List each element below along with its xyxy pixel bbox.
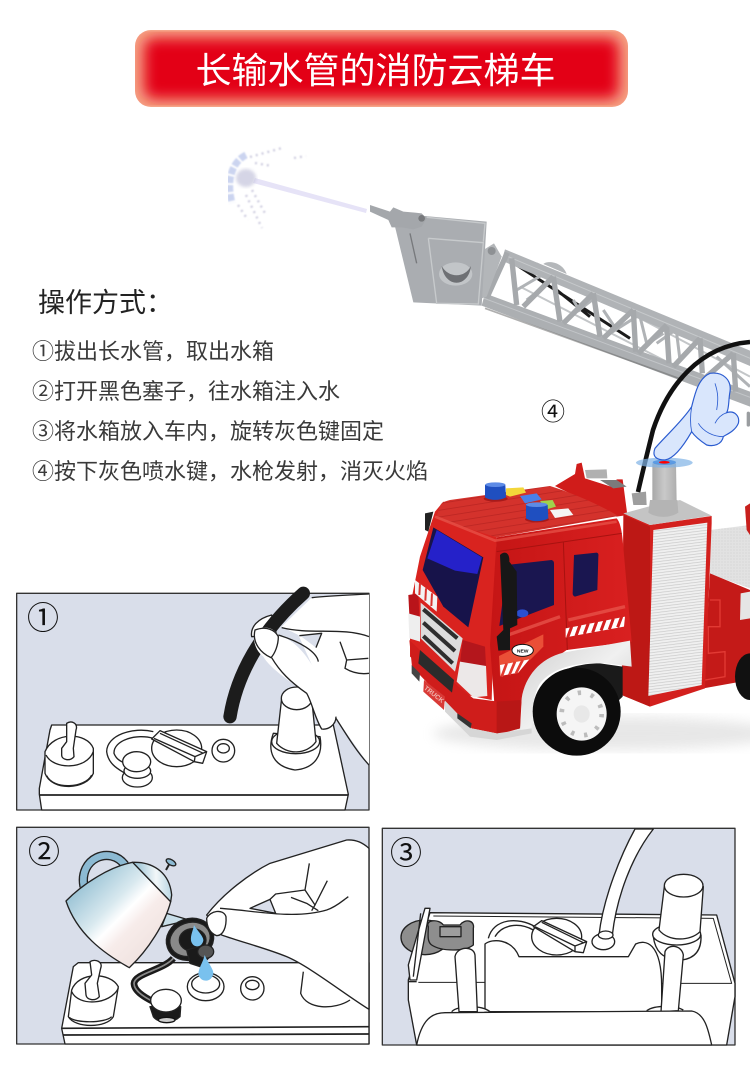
disc and strap (488, 918, 587, 955)
bottom tray (417, 1011, 712, 1045)
instruction steps: ③将水箱放入车内，旋转灰色键固定 (32, 419, 384, 444)
spray button (653, 874, 703, 960)
beacons and roof buttons (484, 482, 573, 522)
ladder: basket and truss boom (370, 205, 750, 427)
water spray from nozzle (230, 148, 367, 228)
black rear of cab (425, 512, 433, 532)
ground shadow (433, 717, 750, 750)
right button partly hidden (301, 972, 350, 1007)
black hose (230, 593, 303, 717)
cab roof (436, 486, 618, 537)
pointing glove icon with press marker (636, 373, 739, 468)
spray button (271, 687, 321, 770)
cap and strap (107, 730, 207, 787)
wheel well (533, 663, 623, 750)
finger behind hose (251, 615, 277, 637)
door stripes (566, 617, 625, 637)
roll shutter (648, 523, 707, 696)
front lights (408, 580, 487, 697)
number 1 badge: ① (27, 600, 59, 636)
hose connector (592, 829, 653, 950)
kettle (66, 855, 189, 968)
instruction steps: ②打开黑色塞子，往水箱注入水 (32, 379, 340, 404)
panel 1: pull out hose (17, 593, 369, 810)
NEW sticker: NEW (517, 648, 529, 654)
dome on rail (543, 262, 567, 274)
side knob at boom end (747, 412, 750, 427)
front wheel (533, 668, 621, 756)
water tank top (62, 963, 369, 1044)
gray cap (401, 908, 474, 980)
tank shell (408, 913, 735, 1045)
title text: 长输水管的消防云梯车 (196, 50, 556, 91)
pump button column (632, 463, 678, 517)
instruction steps: ④按下灰色喷水键，水枪发射，消灭火焰 (32, 459, 428, 484)
upper rail (502, 249, 750, 366)
hand (207, 840, 369, 1009)
straps (452, 946, 683, 1012)
lower rail (482, 293, 750, 407)
bracket behind cab (555, 463, 627, 517)
title banner (135, 30, 628, 107)
number 2 badge: ② (28, 834, 60, 870)
black water hose (638, 342, 750, 492)
windshield (423, 527, 483, 627)
number 3 badge: ③ (390, 835, 422, 871)
mirror (497, 553, 517, 651)
nozzle (370, 205, 427, 229)
heading: operation method: 操作方式： (38, 288, 173, 318)
grille (421, 603, 463, 672)
ring openings (187, 973, 264, 1001)
panel 2: pour water (17, 827, 369, 1044)
hand back (282, 594, 369, 765)
fire truck (408, 463, 750, 756)
thumb (254, 628, 336, 729)
instruction steps (32, 339, 428, 484)
wheel arch (521, 641, 632, 734)
instruction steps: ①拔出长水管，取出水箱 (32, 339, 274, 364)
water tank top (39, 725, 348, 810)
front bumper: TRUCK (422, 685, 445, 705)
side windows (499, 553, 598, 626)
strap and plug (134, 958, 181, 1023)
truss (482, 249, 750, 407)
diagonals (487, 253, 736, 392)
rear section (703, 503, 750, 700)
left knob (45, 722, 93, 786)
step number 4: ④ (541, 399, 565, 426)
tank body (622, 500, 712, 707)
small ring (212, 739, 235, 762)
tank lift insert (485, 941, 662, 1012)
panel 3: fit tank (382, 828, 735, 1045)
water drops (191, 925, 213, 981)
cab front (410, 502, 497, 700)
cab side (490, 518, 632, 735)
front bumper (409, 640, 532, 740)
NEW sticker (499, 634, 543, 677)
left knob (68, 960, 118, 1025)
black cap (160, 912, 220, 967)
basket (395, 216, 502, 306)
